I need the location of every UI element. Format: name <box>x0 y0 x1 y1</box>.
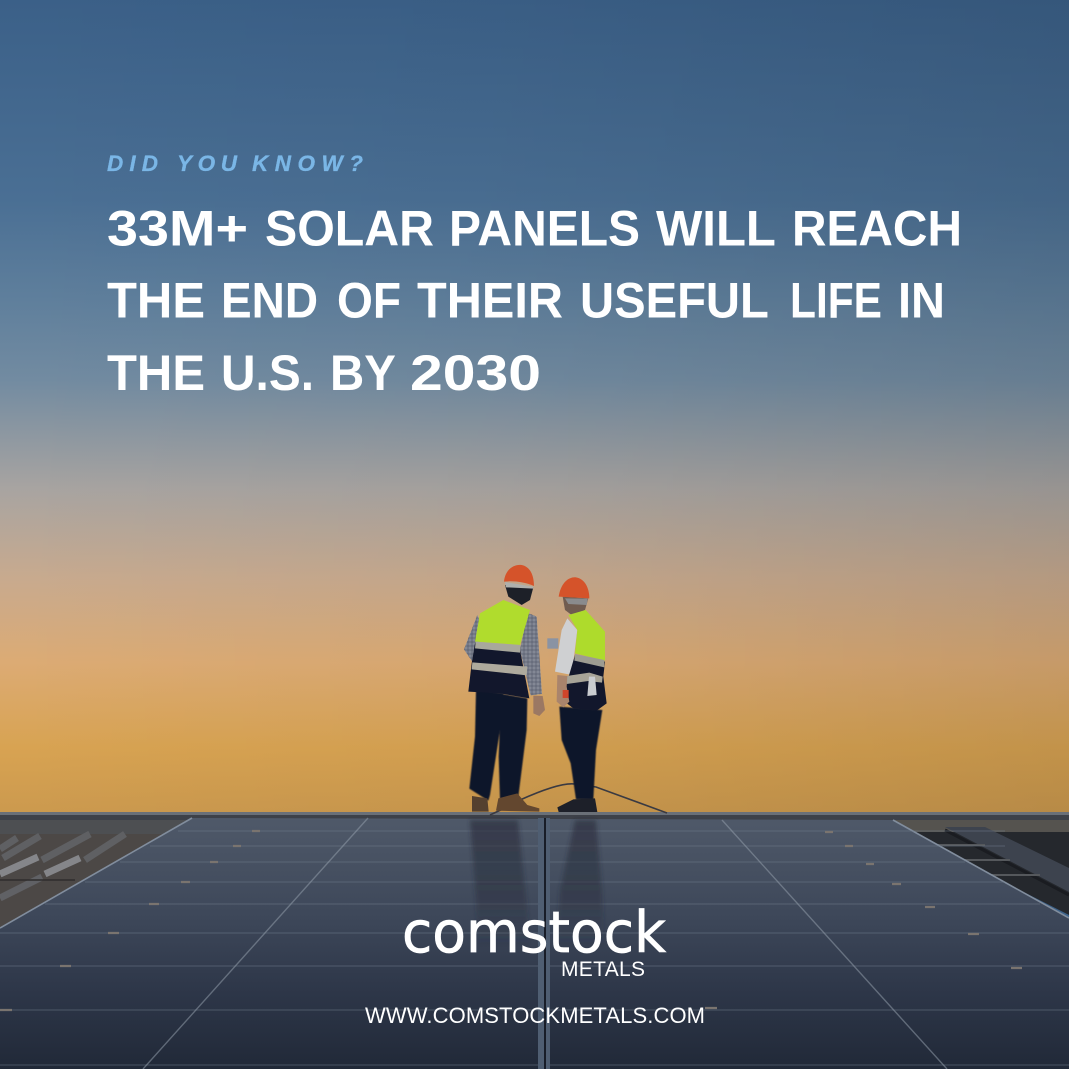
head <box>505 585 533 605</box>
headline: PANELS <box>449 200 640 256</box>
kicker: YOU <box>177 151 238 176</box>
head <box>563 597 588 615</box>
headline: 33M+ <box>107 200 248 256</box>
bottle <box>587 677 597 696</box>
headline: WILL <box>656 200 775 256</box>
glove tag <box>563 690 569 698</box>
logo: METALS <box>561 958 645 981</box>
headline: USEFUL <box>580 272 768 328</box>
headline <box>107 200 962 401</box>
shoe <box>557 798 597 812</box>
left roof tiles <box>0 834 190 930</box>
forearm and hand <box>557 675 569 707</box>
vest upper hi-vis <box>568 610 605 661</box>
vest lower navy <box>468 643 529 698</box>
roof parapet <box>0 812 1069 834</box>
centre panel seam <box>538 818 550 1069</box>
kicker: KNOW? <box>252 151 363 176</box>
headline: SOLAR <box>265 200 434 256</box>
cable on roof <box>490 784 667 815</box>
sky background <box>0 0 1069 815</box>
headline: BY <box>330 345 396 401</box>
worker reflections <box>470 820 605 960</box>
kicker: DID <box>107 151 158 176</box>
rooftop with solar panels <box>0 812 1069 1069</box>
logo: comstock <box>402 900 666 966</box>
workers <box>464 565 607 812</box>
headline: THE <box>107 345 205 401</box>
trousers <box>469 690 527 801</box>
headline: 2030 <box>410 345 541 401</box>
worker right <box>555 577 607 812</box>
headline: REACH <box>792 200 962 256</box>
vest upper hi-vis <box>475 600 530 645</box>
sleeves <box>464 615 483 663</box>
website url: WWW.COMSTOCKMETALS.COM <box>365 1003 705 1028</box>
headline: THE <box>107 272 205 328</box>
trousers <box>559 707 602 799</box>
hard hat <box>504 565 534 586</box>
headline: END <box>221 272 318 328</box>
boots <box>472 796 489 812</box>
headline: THEIR <box>417 272 563 328</box>
vest lower navy <box>558 655 607 711</box>
headline: OF <box>337 272 401 328</box>
worker left <box>464 565 545 812</box>
hard hat <box>559 577 589 598</box>
headline: LIFE <box>790 272 882 328</box>
shirt <box>555 618 577 675</box>
panel clamps <box>0 831 1022 1010</box>
tablet <box>547 638 558 649</box>
hand <box>533 696 545 716</box>
reflective stripes <box>574 654 604 667</box>
right roof racking <box>905 827 1069 915</box>
solar panel array <box>0 818 1069 1069</box>
headline: U.S. <box>221 345 314 401</box>
reflective stripes <box>475 642 521 653</box>
headline: IN <box>898 272 945 328</box>
